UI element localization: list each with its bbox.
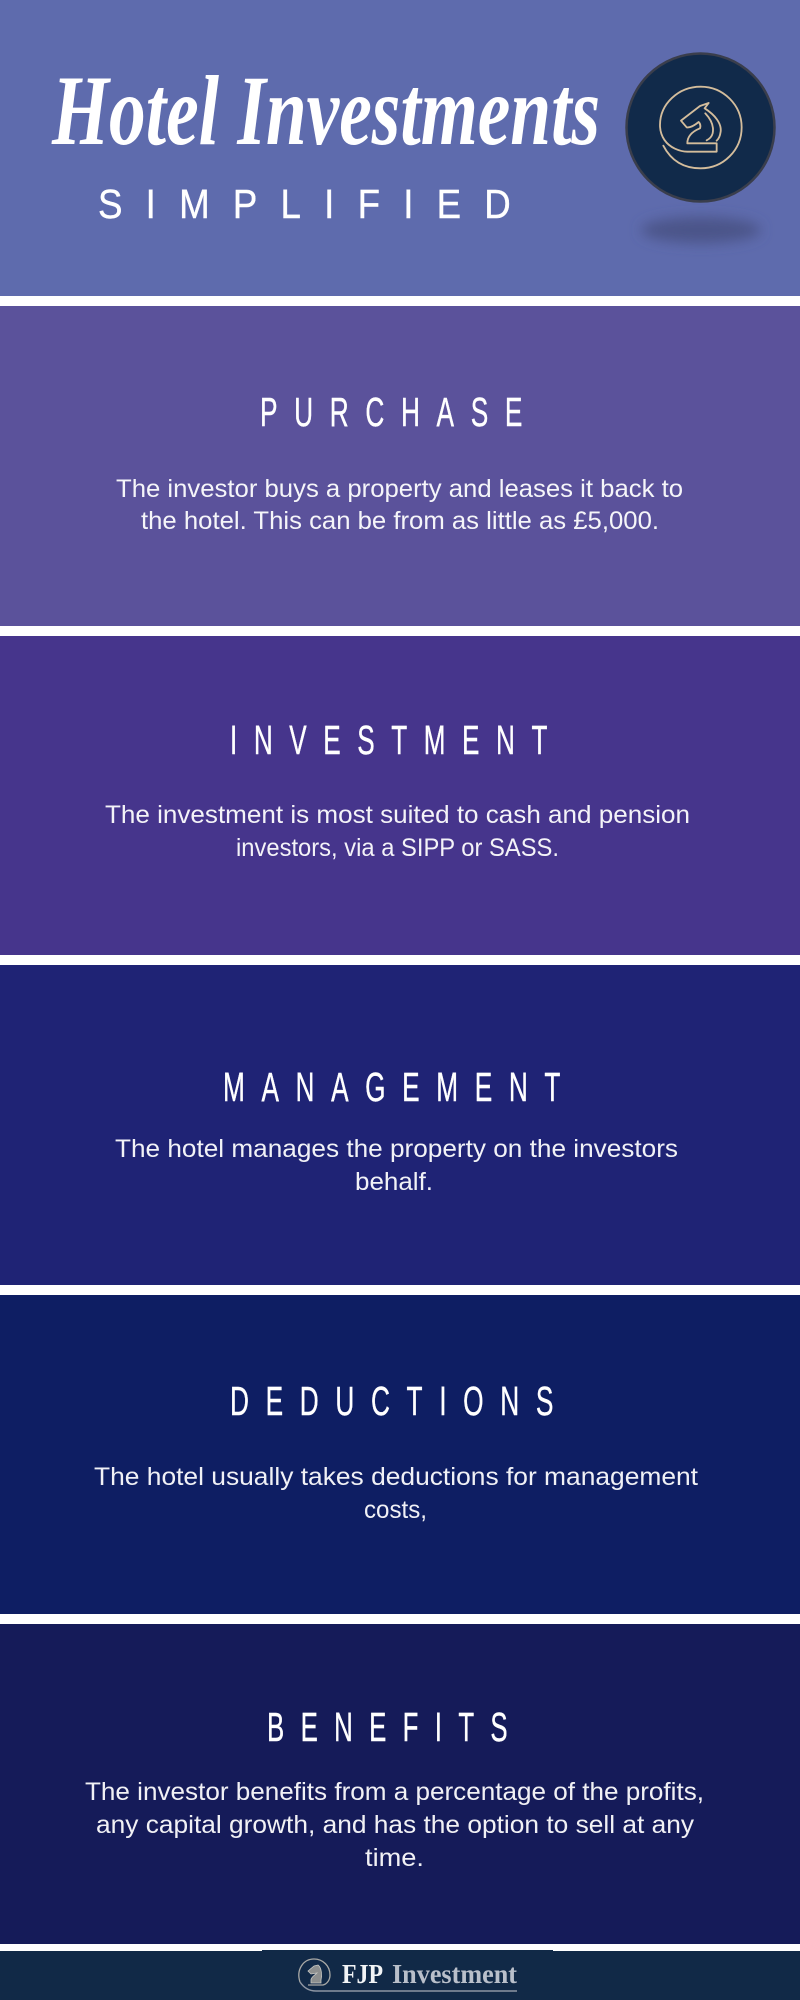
text: investment description: The investment is most suited to cash and pension: [105, 801, 690, 829]
panel: benefits: [0, 1624, 800, 1944]
text: deductions description: [94, 1463, 698, 1524]
heading: benefits: BENEFITS: [267, 1704, 524, 1750]
heading: management: MANAGEMENT: [223, 1064, 577, 1110]
text: management description: [115, 1135, 678, 1196]
panel: purchase: [0, 306, 800, 626]
panel: header: [0, 0, 800, 296]
footer wordmark: [342, 1959, 517, 1989]
text: deductions description: costs,: [364, 1496, 427, 1524]
panel: footer: [0, 1950, 800, 2000]
subtitle: SIMPLIFIED: [98, 181, 534, 227]
text: purchase description: The investor buys a property and leases it back to: [116, 475, 683, 503]
text: purchase description: the hotel. This can be from as little as £5,000.: [141, 507, 659, 535]
panel: deductions: [0, 1295, 800, 1614]
text: benefits description: any capital growth, and has the option to sell at any: [96, 1811, 695, 1839]
text: investment description: [105, 801, 690, 862]
text: management description: The hotel manages the property on the investors: [115, 1135, 678, 1163]
text: management description: behalf.: [355, 1168, 433, 1196]
icon: logo shadow: [641, 217, 761, 243]
panel: investment: [0, 636, 800, 955]
heading: deductions: DEDUCTIONS: [230, 1378, 570, 1424]
text: investment description: investors, via a SIPP or SASS.: [236, 834, 559, 862]
text: benefits description: [85, 1778, 704, 1872]
panel: management: [0, 965, 800, 1285]
title: Hotel Investments: [51, 55, 600, 166]
text: benefits description: The investor benefits from a percentage of the profits,: [85, 1778, 704, 1806]
footer wordmark: FJP: [342, 1959, 383, 1989]
text: purchase description: [116, 475, 683, 535]
icon: footer logo: [299, 1959, 517, 1991]
heading: investment: INVESTMENT: [230, 717, 564, 763]
footer wordmark: Investment: [392, 1959, 517, 1989]
heading: purchase: PURCHASE: [260, 389, 539, 435]
text: deductions description: The hotel usually takes deductions for management: [94, 1463, 698, 1491]
icon: knight logo badge: [626, 54, 774, 202]
text: benefits description: time.: [365, 1844, 424, 1872]
